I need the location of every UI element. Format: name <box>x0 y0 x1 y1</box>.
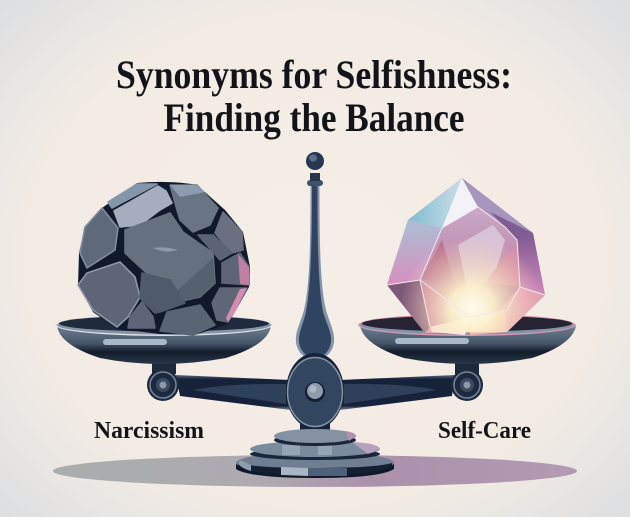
title: Finding the Balance <box>164 95 464 140</box>
middle disc <box>250 448 380 460</box>
top disc <box>274 434 356 446</box>
title: Synonyms for Selfishness: <box>116 52 512 97</box>
base <box>236 422 394 478</box>
left pivot <box>147 362 179 401</box>
central hub <box>286 353 344 429</box>
right pan <box>358 314 576 364</box>
rock fragments <box>78 184 249 335</box>
icon: crystal gem <box>387 178 545 335</box>
right pivot <box>451 362 483 401</box>
label: Narcissism: Narcissism <box>94 418 204 444</box>
scale beam <box>176 375 455 410</box>
ground shadow <box>53 455 577 487</box>
bottom disc <box>236 464 394 478</box>
gem facets <box>387 178 545 335</box>
central pillar <box>296 152 334 360</box>
label: Self-Care: Self-Care <box>438 418 531 444</box>
title <box>116 52 512 140</box>
icon: cracked rock <box>78 182 250 335</box>
rock silhouette <box>78 182 250 335</box>
left pan <box>55 314 273 364</box>
